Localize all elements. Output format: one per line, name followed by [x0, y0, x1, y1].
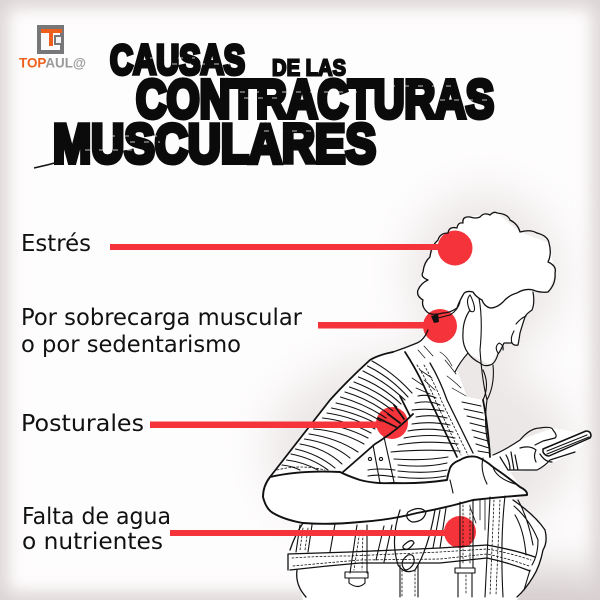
title [53, 36, 494, 174]
label: falta de agua: Falta de agua [22, 504, 171, 530]
red circle: shoulder [376, 407, 408, 439]
carabiner pocket [394, 508, 435, 572]
pointer: estres [110, 244, 438, 250]
title line: de las: DE LAS [272, 54, 346, 80]
bag belt [288, 545, 535, 571]
hand [493, 427, 575, 470]
pointer: posturales [150, 422, 382, 428]
title line: causas: CAUSAS [110, 36, 245, 83]
title line: musculares: MUSCULARES [53, 112, 376, 174]
red circle: neck [423, 309, 457, 343]
labels [21, 231, 303, 555]
red circle: head [438, 230, 472, 266]
label: sobrecarga: Por sobrecarga muscular [21, 305, 303, 331]
label: sedentarismo: o por sedentarismo [21, 332, 241, 358]
logo wordmark: TOPAUL@ [19, 54, 86, 70]
sleeve stripes [282, 361, 412, 470]
logo [19, 25, 86, 70]
logo icon [37, 25, 64, 54]
label: estres: Estrés [21, 231, 91, 257]
figure base fills [263, 213, 592, 600]
phone [543, 431, 591, 456]
red pointer lines [110, 244, 450, 536]
underarm strap [368, 437, 395, 483]
sleeve hem [277, 467, 325, 470]
torso outline [270, 352, 490, 477]
red circle: waist [444, 516, 476, 548]
label: nutrientes: o nutrientes [22, 529, 163, 555]
arm [263, 456, 527, 524]
pointer: neck [318, 322, 426, 328]
bag outline [290, 500, 546, 597]
label: posturales: Posturales [21, 411, 144, 437]
armpit line [343, 396, 413, 472]
hair [418, 212, 555, 314]
title line: contracturas: CONTRACTURAS [136, 70, 494, 130]
ear and earphone cable [438, 295, 493, 450]
face [455, 292, 534, 372]
neck [393, 330, 428, 352]
torso stripes [391, 395, 490, 478]
illustration: woman looking at phone [263, 212, 591, 597]
shoulder strap [405, 352, 457, 457]
bag vertical straps [296, 496, 505, 597]
pointer: nutrientes [170, 530, 450, 536]
